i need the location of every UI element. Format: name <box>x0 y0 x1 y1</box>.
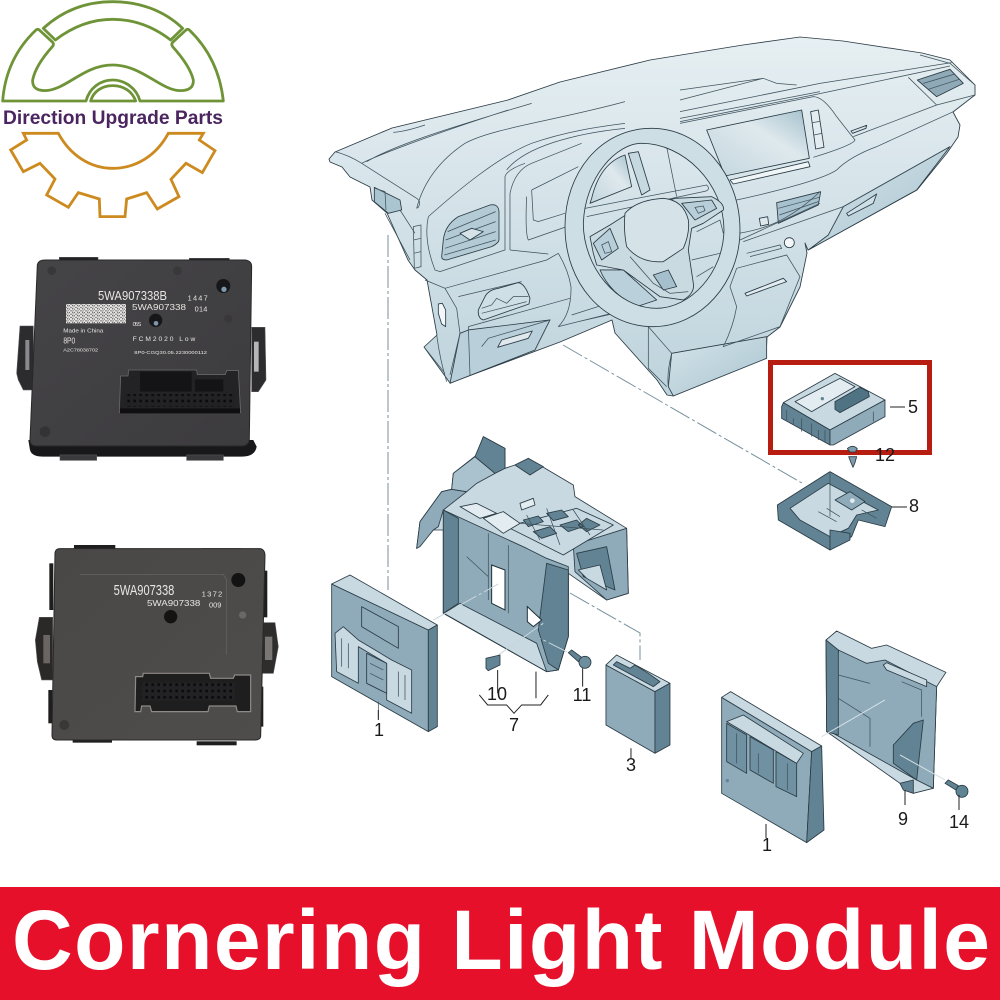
label text: FCM2020 Low <box>133 336 196 343</box>
part numbers: 7 <box>509 715 519 735</box>
part 1 lower module <box>722 692 824 843</box>
carrier rear box <box>573 528 628 600</box>
touch screen <box>707 110 809 176</box>
label text: 8P0 <box>63 337 76 346</box>
side light <box>438 303 446 327</box>
button strip <box>730 162 810 184</box>
console lower face <box>668 337 767 396</box>
part numbers: 14 <box>949 812 969 832</box>
part 5 sides <box>782 403 830 445</box>
dashboard illustration <box>329 37 975 396</box>
left wheel buttons <box>593 228 618 260</box>
part numbers: 1 <box>762 835 772 855</box>
bracket symbol for part 7 <box>378 668 631 758</box>
cluster seen through wheel <box>590 155 632 203</box>
small button <box>759 217 769 226</box>
carrier front plate <box>443 510 568 672</box>
label text: 1372 <box>202 590 222 599</box>
data matrix label <box>66 304 126 323</box>
dashboard right half details <box>680 55 975 250</box>
center airbag pad <box>624 198 689 262</box>
connector lines part 9 <box>822 700 945 780</box>
banner title: Cornering Light Module <box>12 893 990 987</box>
module body <box>30 260 252 446</box>
dashboard silhouette <box>329 37 975 396</box>
left air vent <box>442 205 499 260</box>
label text: A2C78038702 <box>63 348 98 354</box>
label text: 1447 <box>188 294 208 303</box>
glove handle <box>498 331 532 347</box>
connector <box>135 673 251 712</box>
logo steering wheel icon <box>3 2 223 101</box>
part numbers: 9 <box>898 809 908 829</box>
part 14 bolt <box>945 780 968 797</box>
switch panel <box>478 283 530 320</box>
label text: 05S <box>133 322 142 328</box>
glove slot <box>847 194 877 216</box>
part 11 bolt <box>568 650 591 668</box>
small slot <box>851 125 867 133</box>
part 10 clip <box>486 655 500 671</box>
bracket floor <box>790 483 878 537</box>
right air vent <box>917 69 963 97</box>
connector lines in carrier <box>433 584 567 655</box>
wheel spokes <box>590 197 724 300</box>
part 3 module <box>606 655 670 753</box>
part 9 faces <box>833 650 937 788</box>
part numbers: 1 <box>374 720 384 740</box>
part 12 screw <box>847 446 857 467</box>
label text: Made in China <box>63 329 104 335</box>
label text: 009 <box>209 600 221 609</box>
carrier lattice <box>507 508 613 555</box>
part 7 carrier <box>417 437 628 672</box>
photo: module 5WA907338 <box>35 545 278 745</box>
bolt 14 head <box>956 785 968 797</box>
part 8 bracket <box>777 472 892 550</box>
center air vent <box>777 192 821 223</box>
leader ticks <box>766 407 959 838</box>
carrier window holes <box>492 565 505 610</box>
part numbers: 11 <box>573 685 591 705</box>
right wheel buttons <box>682 200 717 220</box>
logo text: Direction Upgrade Parts <box>3 107 223 129</box>
label text: 5WA907338 <box>147 598 201 608</box>
logo: Direction Upgrade Parts <box>0 0 230 220</box>
module body <box>52 549 265 740</box>
part numbers <box>374 397 969 855</box>
part numbers: 12 <box>875 445 895 465</box>
part numbers: 3 <box>626 755 636 775</box>
red banner <box>0 887 1000 1000</box>
part 3 top and side <box>606 655 670 692</box>
screen side buttons <box>811 110 824 149</box>
carrier top opening <box>515 458 543 475</box>
module 1 top and side <box>332 575 437 630</box>
part numbers: 5 <box>908 397 918 417</box>
part 9 bracket <box>826 631 946 793</box>
part 5 module <box>782 373 885 445</box>
bolt 11 head <box>579 656 591 668</box>
label text: 014 <box>195 304 207 313</box>
part numbers: 10 <box>487 684 507 704</box>
part 1 control module <box>332 575 437 732</box>
vent knob <box>460 228 483 240</box>
label text: 5WA907338 <box>132 302 186 312</box>
label text: 5WA907338B <box>98 288 167 303</box>
steering wheel and console <box>565 128 820 396</box>
logo gear icon <box>11 133 215 217</box>
part numbers: 8 <box>909 496 919 516</box>
red highlight box around part 5 <box>770 362 930 452</box>
wheel ring <box>565 128 740 327</box>
label text <box>114 583 222 609</box>
side clips <box>17 257 266 460</box>
dashboard left half details <box>335 102 625 383</box>
console slot <box>745 278 787 296</box>
side clips <box>48 545 267 745</box>
label text: 5WA907338 <box>114 583 174 599</box>
lower module top and side <box>722 692 822 752</box>
carrier wing <box>417 489 467 548</box>
start knob <box>784 238 794 248</box>
connector <box>119 370 241 413</box>
label text <box>63 288 208 355</box>
label text: 8P0-CGQ30.05.2230000112 <box>134 350 207 355</box>
lower wheel spoke recess <box>653 270 677 290</box>
dashed leader lines <box>388 235 802 660</box>
photo: module 5WA907338B <box>17 257 266 460</box>
